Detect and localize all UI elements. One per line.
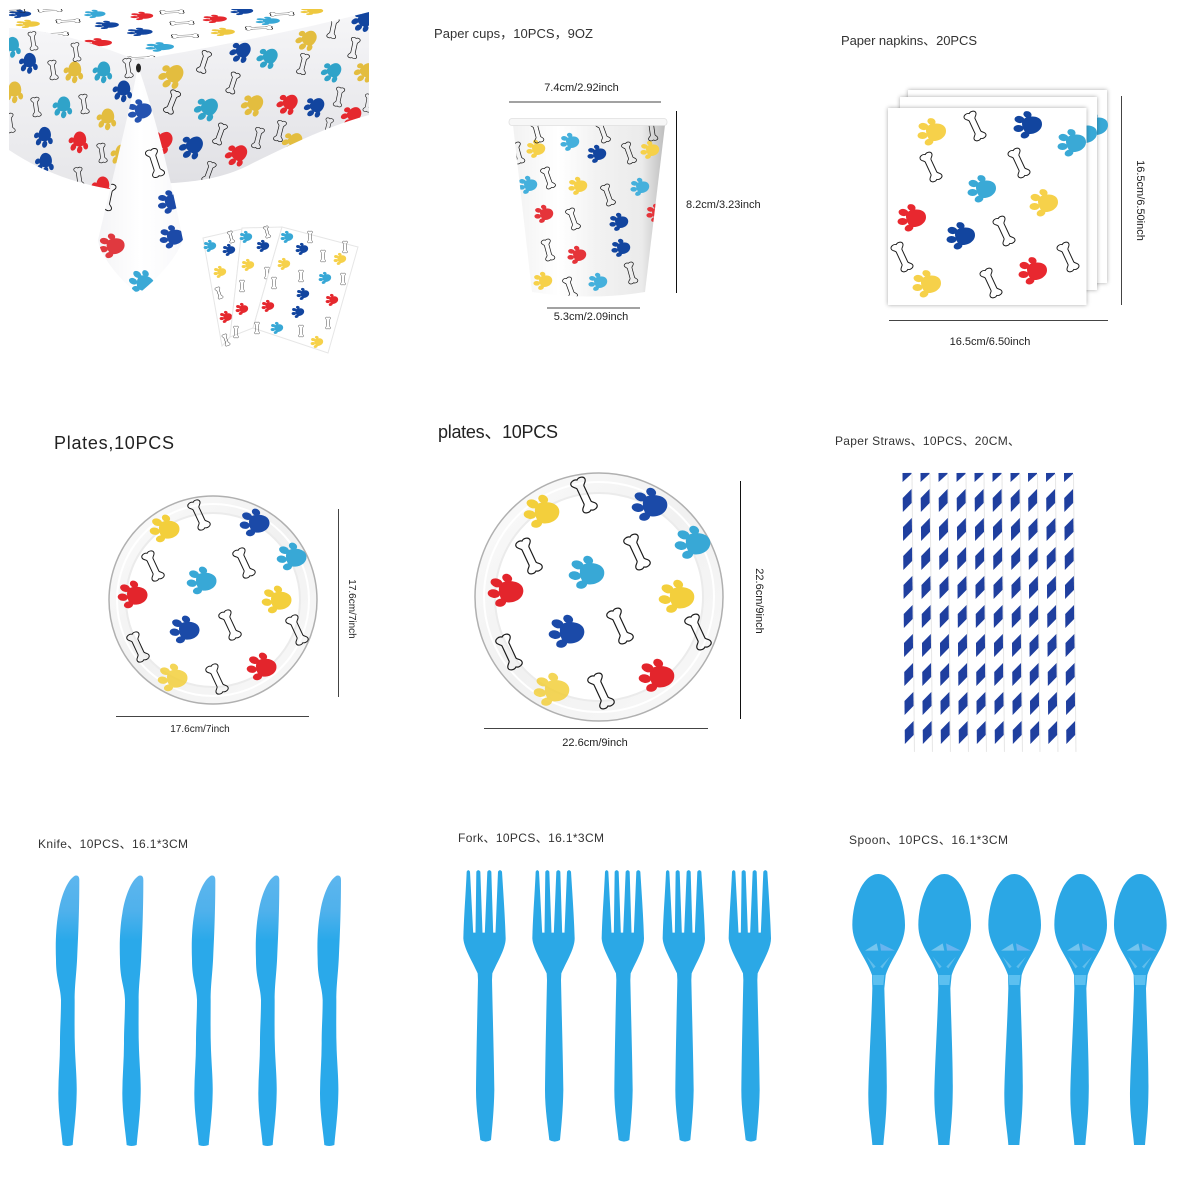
folded tablecloth packages	[203, 226, 358, 353]
panel: knives	[56, 876, 341, 1146]
cup rim	[509, 118, 667, 126]
back napkin paw peek	[1080, 111, 1108, 141]
heading: paper cups: Paper cups，10PCS，9OZ	[434, 26, 593, 41]
heading: fork: Fork、10PCS、16.1*3CM	[458, 831, 604, 845]
back napkin	[908, 90, 1107, 283]
package sheet 1	[203, 229, 242, 346]
panel: small plate	[109, 496, 317, 704]
panel: paper straws	[902, 473, 1076, 752]
heading: small plates: Plates,10PCS	[54, 433, 174, 453]
tablecloth left side panel	[9, 28, 137, 189]
heading: large plates: plates、10PCS	[438, 422, 558, 442]
heading: paper straws: Paper Straws、10PCS、20CM、	[835, 434, 1020, 448]
plate body	[475, 473, 723, 721]
dimension: cup bottom width	[547, 308, 640, 323]
dimension: small plate width: 17.6cm/7inch	[170, 724, 230, 735]
panel: paper cup	[509, 118, 667, 300]
cup body with paw pattern	[511, 119, 665, 300]
dimension: large plate width: 22.6cm/9inch	[562, 737, 628, 749]
heading: knife: Knife、10PCS、16.1*3CM	[38, 837, 188, 851]
tablecloth right side panel	[137, 5, 380, 184]
panel: tablecloth product	[0, 5, 380, 353]
dimension: large plate height: 22.6cm/9inch	[753, 568, 765, 634]
plate pattern	[116, 499, 309, 695]
dimension: napkin width: 16.5cm/6.50inch	[950, 336, 1030, 348]
package sheet 2	[230, 226, 282, 338]
dimension: cup top width: 7.4cm/2.92inch	[544, 82, 619, 94]
middle napkin	[900, 97, 1097, 290]
dimension: cup height: 8.2cm/3.23inch	[686, 199, 761, 211]
package sheet 3	[253, 227, 358, 353]
dimension: napkin height: 16.5cm/6.50inch	[1134, 160, 1146, 241]
dimension: cup bottom width: 5.3cm/2.09inch	[554, 311, 628, 323]
plate body	[109, 496, 317, 704]
panel: large plate	[475, 473, 723, 721]
plate pattern	[486, 476, 713, 710]
panel: spoons	[852, 874, 1167, 1145]
front napkin	[888, 108, 1086, 305]
dimension: small plate height: 17.6cm/7inch	[346, 579, 357, 639]
tablecloth hanging corner	[98, 64, 184, 299]
heading: spoon: Spoon、10PCS、16.1*3CM	[849, 833, 1008, 847]
tablecloth top surface	[9, 9, 324, 60]
panel: napkins stack	[888, 90, 1108, 305]
heading: paper napkins: Paper napkins、20PCS	[841, 33, 977, 48]
middle napkin paw peek	[1068, 119, 1097, 149]
panel: forks	[463, 870, 771, 1142]
